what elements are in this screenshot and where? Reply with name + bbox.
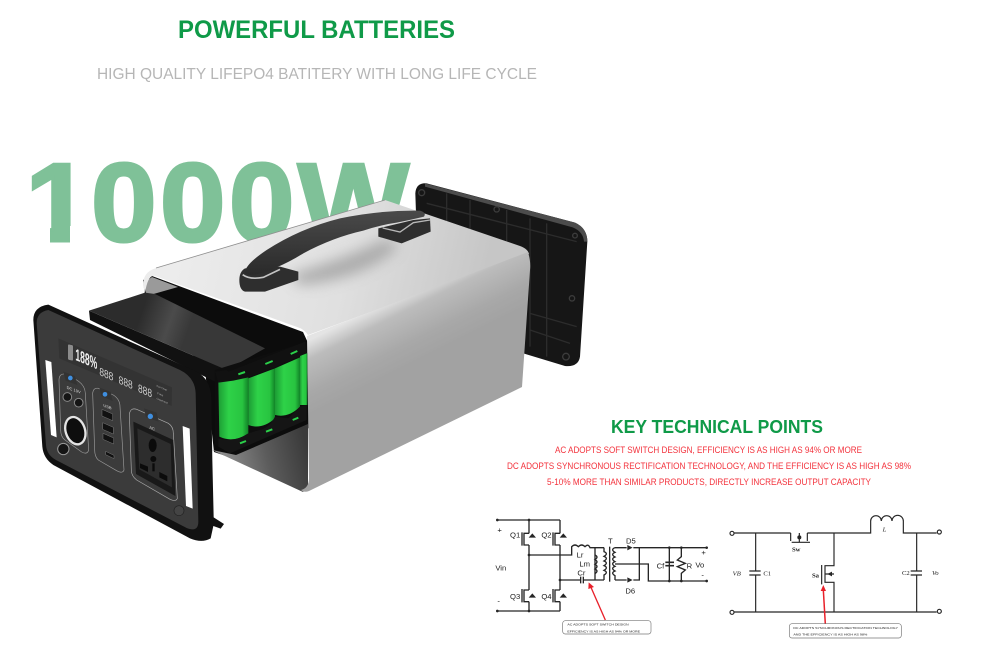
DC circuit diagram: Sa bbox=[812, 573, 820, 580]
power station product illustration bbox=[33, 183, 587, 541]
handle shadow bbox=[290, 240, 396, 285]
front face bbox=[301, 252, 530, 492]
AC circuit diagram: + bbox=[701, 548, 706, 557]
callout: AC ADOPTS SOFT SWITCH DESIGN bbox=[567, 622, 629, 626]
top face bbox=[143, 200, 529, 335]
callout: EFFICIENCY IS AS HIGH AS 94% OR MORE bbox=[567, 629, 640, 633]
AC circuit diagram: Cr bbox=[577, 568, 586, 577]
LCD display bbox=[58, 338, 172, 406]
subtitle: HIGH QUALITY LIFEPO4 BATITERY WITH LONG LIFE CYCLE bbox=[97, 66, 537, 83]
AC circuit diagram: Lm bbox=[579, 559, 590, 568]
panel face bbox=[37, 310, 198, 529]
title: POWERFUL BATTERIES bbox=[178, 16, 455, 44]
large power rating: 1000W bbox=[25, 141, 409, 265]
DC circuit diagram: C2 bbox=[902, 570, 910, 577]
AC circuit diagram: Cf bbox=[657, 561, 665, 570]
DC port group bbox=[58, 372, 89, 455]
USB port group: USB bbox=[103, 403, 112, 411]
DC circuit diagram: C1 bbox=[763, 571, 771, 578]
cell backdrop bbox=[215, 342, 307, 453]
AC circuit diagram: Lr bbox=[577, 550, 584, 559]
LCD display: 188% bbox=[75, 345, 97, 373]
LCD display: Fuse bbox=[157, 391, 164, 398]
AC circuit diagram: + bbox=[497, 525, 502, 534]
pack top cover bbox=[89, 293, 265, 370]
AC circuit diagram: Vo bbox=[695, 561, 704, 570]
AC circuit diagram: R bbox=[687, 561, 693, 570]
panel frame bbox=[33, 305, 224, 541]
USB port group bbox=[93, 387, 124, 472]
AC circuit diagram: D5 bbox=[626, 537, 636, 546]
callout: DC ADOPTS SYNCHRONOUS RECTIFICATION TECHNOLOGY bbox=[793, 626, 898, 630]
key point: DC efficiency: DC ADOPTS SYNCHRONOUS RECTIFICATION TECHNOLOGY, AND THE EFFICIENCY IS AS HIGH AS 98% bbox=[507, 461, 911, 472]
callout: AND THE EFFICIENCY IS AS HIGH AS 98% bbox=[793, 632, 868, 636]
AC circuit diagram: Q1 bbox=[510, 531, 520, 540]
AC circuit diagram: T bbox=[608, 536, 613, 545]
key point: output capacity: 5-10% MORE THAN SIMILAR PRODUCTS, DIRECTLY INCREASE OUTPUT CAPACITY bbox=[547, 477, 872, 488]
upper cell caps bbox=[215, 342, 307, 383]
DC circuit diagram: Sw bbox=[792, 546, 801, 553]
red arrow bbox=[821, 585, 826, 624]
callout bbox=[563, 621, 651, 634]
callout bbox=[789, 624, 901, 638]
AC circuit diagram: D6 bbox=[625, 587, 635, 596]
AC circuit diagram: - bbox=[497, 597, 500, 606]
DC circuit diagram: L bbox=[882, 527, 887, 534]
AC circuit diagram: - bbox=[701, 571, 704, 580]
lower cell caps bbox=[218, 405, 307, 453]
DC port group: DC 19V bbox=[67, 385, 81, 395]
pack underside strip bbox=[89, 311, 227, 382]
LCD display: 888 bbox=[99, 364, 114, 384]
AC socket: AC bbox=[149, 425, 155, 432]
power button bbox=[174, 506, 184, 516]
right handle foot bbox=[378, 218, 431, 243]
left light bar bbox=[45, 360, 57, 437]
carrying handle bbox=[239, 211, 431, 292]
AC circuit diagram bbox=[495, 519, 708, 634]
key point: AC efficiency: AC ADOPTS SOFT SWITCH DESIGN, EFFICIENCY IS AS HIGH AS 94% OR MORE bbox=[555, 445, 862, 456]
LCD display: 888 bbox=[119, 373, 133, 392]
DC circuit diagram: VB bbox=[733, 571, 741, 578]
AC circuit diagram: Q4 bbox=[541, 592, 552, 601]
enclosure interior bbox=[143, 276, 309, 458]
key technical points heading: KEY TECHNICAL POINTS bbox=[611, 416, 823, 437]
battery pack bbox=[89, 293, 307, 453]
left handle foot bbox=[239, 267, 298, 292]
LCD display: For Over bbox=[157, 384, 167, 392]
red arrow bbox=[588, 582, 605, 620]
DC circuit diagram bbox=[730, 515, 941, 638]
AC socket bbox=[129, 408, 177, 500]
right light bar bbox=[183, 426, 193, 509]
AC circuit diagram: Q2 bbox=[541, 531, 552, 540]
grip bbox=[245, 211, 425, 275]
silver enclosure bbox=[143, 200, 530, 492]
AC circuit diagram: Vin bbox=[495, 564, 506, 573]
LCD display: Overheat bbox=[157, 396, 168, 405]
back cover plate bbox=[415, 183, 587, 366]
AC circuit diagram: Q3 bbox=[510, 592, 520, 601]
green battery cells bbox=[218, 353, 307, 439]
LCD display: 888 bbox=[138, 381, 152, 401]
DC circuit diagram: Vo bbox=[932, 570, 939, 577]
control panel bbox=[33, 305, 224, 541]
